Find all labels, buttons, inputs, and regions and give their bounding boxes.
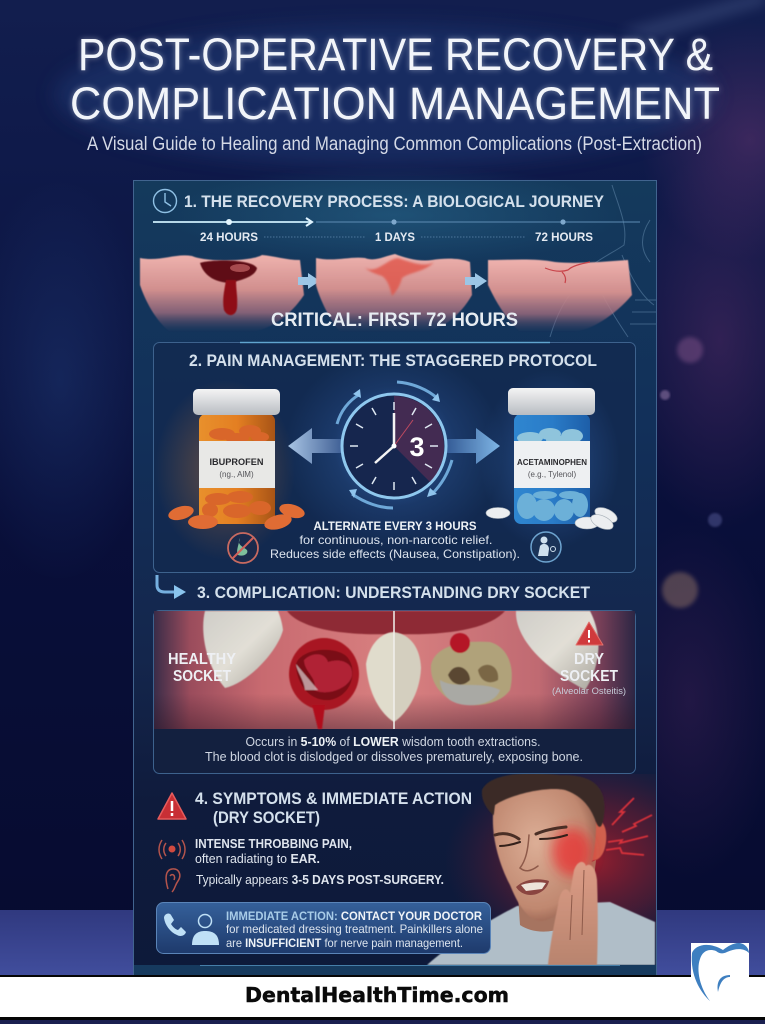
- label: healthy socket: [168, 651, 237, 685]
- icon: warning triangle: [576, 622, 603, 645]
- text: alternate every 3 hours: [270, 521, 520, 561]
- gum illustration: fresh wound with blood clot: [140, 255, 304, 332]
- text: action: for medicated dressing treatment. Painkillers alone: [226, 922, 483, 936]
- clock: 3: [409, 432, 425, 462]
- label: dry socket: [552, 651, 626, 696]
- brows and closed eyes: [495, 827, 567, 871]
- text: onset: Typically appears 3-5 DAYS POST-SURGERY.: [196, 872, 444, 887]
- pill bottle: ibuprofen: [167, 389, 306, 532]
- title: POST-OPERATIVE RECOVERY &: [78, 29, 713, 80]
- text: action: are INSUFFICIENT for nerve pain management.: [226, 936, 463, 950]
- text: alternate every 3 hours: ALTERNATE EVERY 3 HOURS: [314, 521, 477, 533]
- timeline labels: 72 HOURS: [535, 230, 593, 244]
- heading 2: 2. PAIN MANAGEMENT: THE STAGGERED PROTOCOL: [189, 352, 597, 370]
- man in pain illustration: [134, 774, 656, 975]
- label: healthy socket: HEALTHY: [168, 651, 237, 668]
- timeline: [153, 218, 640, 226]
- pill bottle: ibuprofen: IBUPROFEN: [210, 457, 264, 467]
- icon: clock: [154, 190, 176, 212]
- text: throbbing pain: INTENSE THROBBING PAIN,: [195, 836, 352, 851]
- pill bottle: ibuprofen: (ng., AlM): [219, 470, 254, 479]
- text: action: IMMEDIATE ACTION: CONTACT YOUR DOCTOR: [226, 909, 482, 923]
- icon: no stomach upset: [228, 533, 258, 563]
- pill bottle: acetaminophen: [486, 388, 619, 533]
- hair: [482, 774, 605, 827]
- timeline labels: 24 HOURS: [200, 230, 258, 244]
- timeline labels: 1 DAYS: [375, 230, 415, 244]
- anatomy figure outline: [550, 185, 656, 337]
- arrow: [465, 273, 487, 289]
- shirt: [427, 902, 655, 965]
- heading 4: 4. SYMPTOMS & IMMEDIATE ACTION: [195, 790, 472, 808]
- footer bar: [0, 975, 765, 1024]
- timeline labels: [200, 230, 593, 244]
- panel 3: dry socket: [154, 610, 636, 774]
- pill bottle: acetaminophen: (e.g., Tylenol): [528, 470, 576, 479]
- neck: [518, 860, 596, 932]
- arrow: [298, 273, 320, 289]
- text: dry socket explanation: [205, 735, 583, 764]
- heading 1: 1. THE RECOVERY PROCESS: A BIOLOGICAL JOURNEY: [184, 193, 604, 211]
- text: alternate every 3 hours: Reduces side effects (Nausea, Constipation).: [270, 547, 520, 561]
- face: [493, 786, 596, 921]
- lightning: [606, 798, 652, 855]
- section 4: symptoms: [134, 755, 735, 977]
- arrow: left: [288, 428, 345, 464]
- icon: throbbing pain: [159, 840, 185, 859]
- arrow: to section 3: [157, 575, 176, 592]
- gum illustration: nearly healed: [488, 260, 632, 332]
- icon: warning triangle: [158, 793, 186, 819]
- text: throbbing pain: often radiating to EAR.: [195, 851, 320, 866]
- gum illustration: healing: [316, 254, 472, 332]
- text: action: [226, 909, 483, 950]
- label: dry socket: SOCKET: [560, 668, 618, 685]
- section 1: recovery process: [140, 190, 640, 332]
- logo: tooth: [691, 943, 749, 1002]
- heading 4: (DRY SOCKET): [213, 809, 320, 827]
- icon: phone and doctor: [164, 914, 219, 945]
- heading 4: [195, 790, 472, 827]
- photo: sockets: [154, 611, 635, 729]
- red cheek: [552, 828, 592, 876]
- label: dry socket: DRY: [574, 651, 605, 668]
- footer website name: DentalHealthTime.com: [245, 983, 509, 1007]
- title: [70, 29, 720, 129]
- callout: critical: CRITICAL: FIRST 72 HOURS: [271, 309, 518, 331]
- panel 2: pain management: [154, 342, 636, 572]
- mouth: [516, 879, 549, 895]
- icon: ear: [166, 869, 180, 892]
- pill bottle: acetaminophen: ACETAMINOPHEN: [517, 457, 587, 467]
- healthy socket clot: [289, 638, 359, 729]
- main panel: [134, 180, 656, 978]
- section 3 heading: [157, 575, 590, 602]
- text: dry socket explanation: Occurs in 5-10% of LOWER wisdom tooth extractions.: [246, 735, 540, 749]
- arrow: right: [443, 428, 500, 464]
- text: throbbing pain: [195, 836, 352, 866]
- text: alternate every 3 hours: for continuous, non-narcotic relief.: [300, 533, 492, 547]
- dry socket: [431, 633, 512, 705]
- heading 3: 3. COMPLICATION: UNDERSTANDING DRY SOCKET: [197, 584, 590, 602]
- text: dry socket explanation: The blood clot is dislodged or dissolves prematurely, exposing bone.: [205, 750, 583, 764]
- clock: [334, 382, 454, 508]
- callout: immediate action: [156, 902, 490, 954]
- icon: constipation person: [531, 532, 561, 562]
- ear: [590, 821, 606, 860]
- hand: [548, 862, 598, 965]
- subtitle: A Visual Guide to Healing and Managing Common Complications (Post-Extraction): [87, 134, 702, 155]
- bottom strip: [134, 965, 656, 977]
- title: COMPLICATION MANAGEMENT: [70, 78, 720, 129]
- label: dry socket: (Alveolar Osteitis): [552, 686, 626, 696]
- label: healthy socket: SOCKET: [173, 668, 231, 685]
